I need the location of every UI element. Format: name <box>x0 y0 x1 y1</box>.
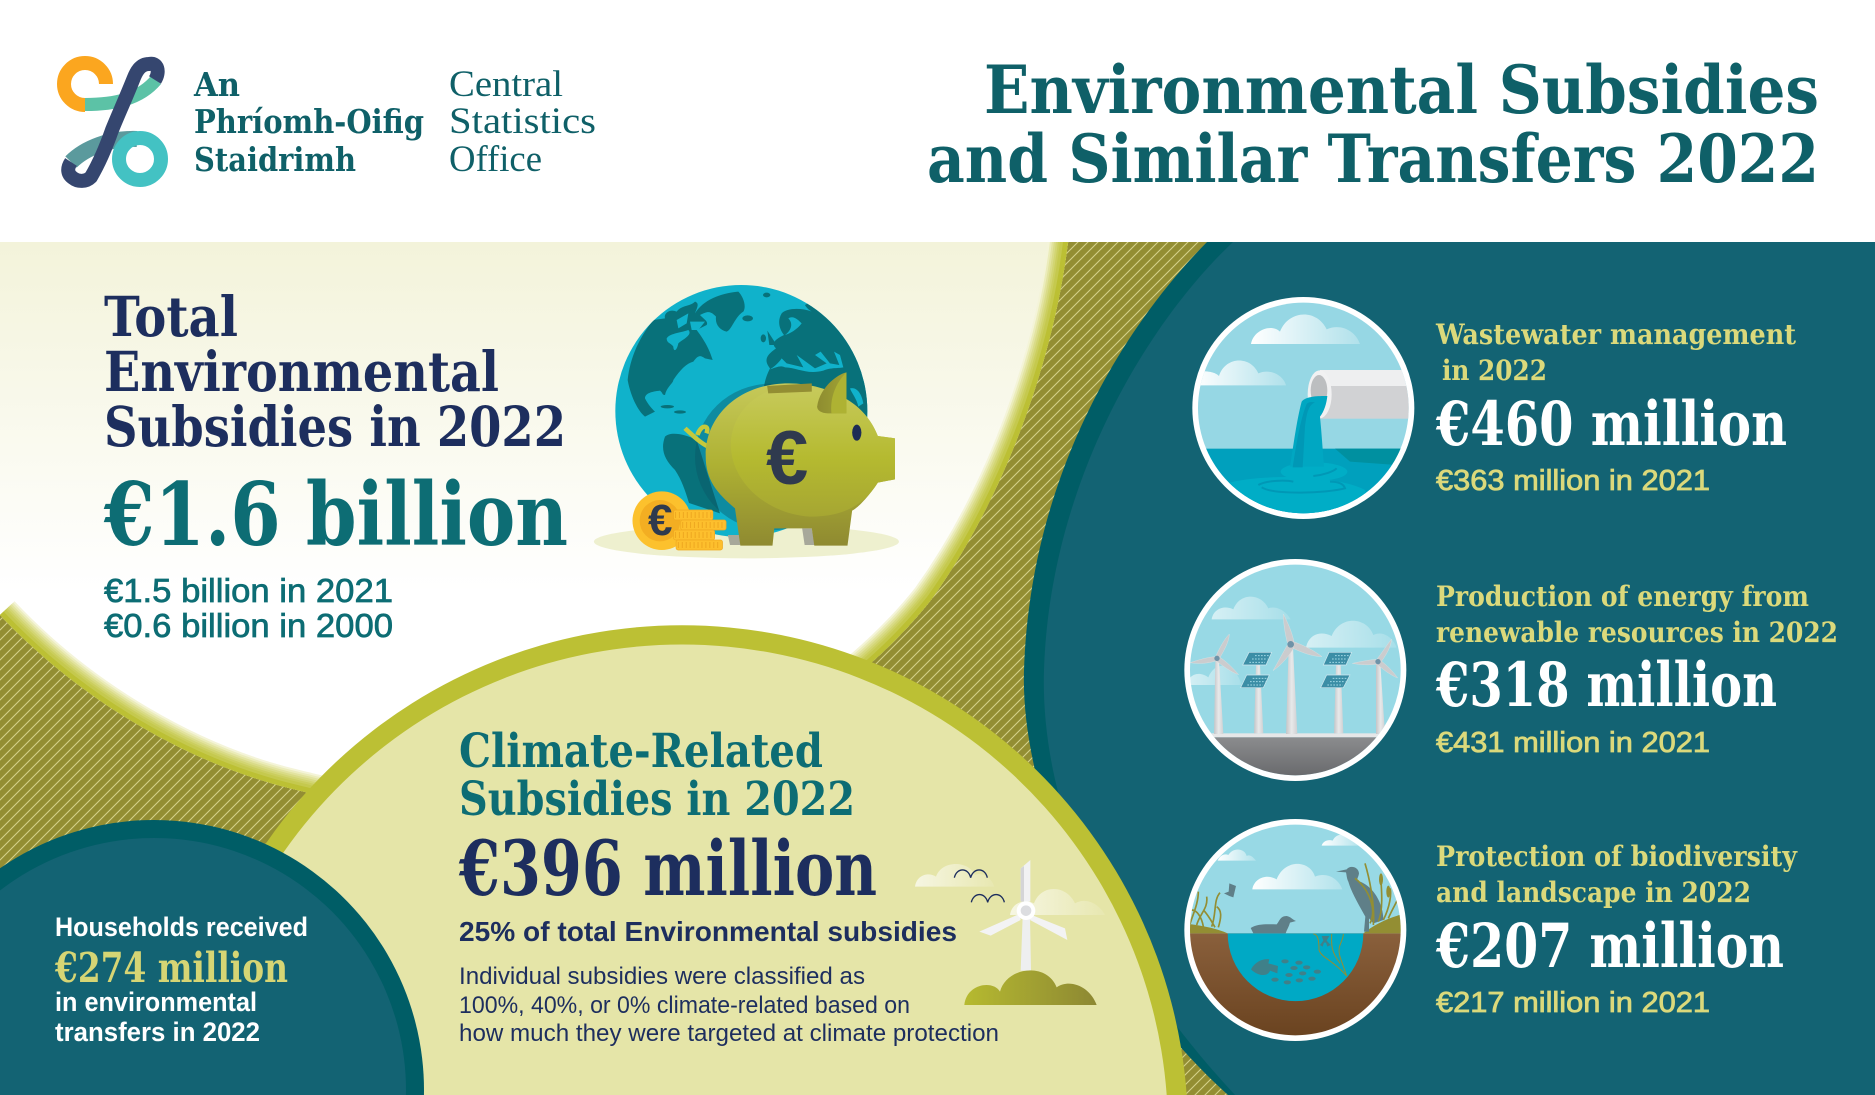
heading: climate-related subsidies: Subsidies in 2022 <box>459 772 855 827</box>
renewable energy text <box>1435 580 1838 759</box>
climate description: Individual subsidies were classified as <box>459 963 865 990</box>
logo symbol <box>64 63 161 181</box>
wastewater text: in 2022 <box>1442 354 1547 387</box>
heading: total environmental subsidies: Total <box>104 284 238 349</box>
households text: transfers in 2022 <box>55 1017 260 1047</box>
logo wordmark English: Central <box>449 64 563 105</box>
logo wordmark Irish: Staidrimh <box>194 140 356 179</box>
biodiversity text: €217 million in 2021 <box>1436 987 1710 1019</box>
logo wordmark Irish: An <box>193 65 240 104</box>
heading: total environmental subsidies: Environmental <box>104 339 499 404</box>
logo wordmark Irish <box>193 65 424 179</box>
biodiversity amount: €207 million <box>1435 911 1784 982</box>
icon: wind turbine on hill <box>915 860 1105 1005</box>
north america <box>628 292 745 417</box>
logo wordmark English: Office <box>449 139 542 180</box>
big number: 1.6 billion: €1.6 billion <box>103 463 568 566</box>
wastewater text <box>1435 318 1796 497</box>
water plants <box>1313 934 1347 976</box>
piggy bank and coins <box>632 372 895 550</box>
panel: right teal background <box>1024 242 1875 1095</box>
previous years comparison: €1.5 billion in 2021 <box>104 572 393 609</box>
icon: globe and piggy bank <box>594 285 910 558</box>
icon: wastewater pipe <box>1190 297 1417 525</box>
turbine and panel towers <box>1214 647 1385 734</box>
climate description <box>459 963 999 1047</box>
coin euro sign: € <box>648 496 672 545</box>
renewable energy text: renewable resources in 2022 <box>1436 616 1838 649</box>
panel: total subsidies background <box>0 242 1068 825</box>
heading: climate-related subsidies: Climate-Related <box>459 724 823 779</box>
big number: 396 million: €396 million <box>458 824 877 913</box>
icon: wind turbines and solar panels <box>1183 559 1410 787</box>
households text: in environmental <box>55 987 257 1017</box>
heading: climate-related subsidies <box>459 724 855 827</box>
wastewater text: €363 million in 2021 <box>1436 465 1710 497</box>
icon: wetland biodiversity <box>1183 819 1410 1047</box>
reeds <box>1190 863 1400 927</box>
wastewater text: Wastewater management <box>1435 318 1796 351</box>
share of total: 25% of total Environmental subsidies <box>459 916 957 947</box>
renewable energy text: €431 million in 2021 <box>1436 727 1710 759</box>
south america <box>663 434 720 513</box>
logo wordmark English: Statistics <box>449 101 596 142</box>
eurasia and africa <box>764 304 868 418</box>
biodiversity text <box>1435 840 1798 1019</box>
heading: total environmental subsidies <box>104 284 566 459</box>
logo wordmark English <box>449 64 596 180</box>
panel: households circle <box>0 820 424 1095</box>
households amount: €274 million <box>54 944 288 992</box>
panel: climate-related circle <box>177 625 1187 1095</box>
frog <box>1320 936 1331 947</box>
biodiversity text: Protection of biodiversity <box>1436 840 1798 873</box>
households text <box>54 912 308 1047</box>
climate description: how much they were targeted at climate protection <box>459 1020 999 1047</box>
households text: Households received <box>55 912 308 942</box>
fish <box>1251 959 1321 984</box>
previous years comparison: €0.6 billion in 2000 <box>104 607 393 644</box>
previous years comparison <box>104 572 393 644</box>
iceland and svalbard <box>742 315 753 321</box>
butterfly <box>1224 883 1236 897</box>
title <box>927 51 1819 198</box>
wastewater amount: €460 million <box>1435 389 1787 460</box>
logo <box>64 63 596 181</box>
hatched olive background <box>0 242 1875 1095</box>
logo wordmark Irish: Phríomh-Oifig <box>194 102 424 141</box>
piggy bank euro sign: € <box>766 416 808 501</box>
globe <box>615 285 868 536</box>
heading: total environmental subsidies: Subsidies in 2022 <box>104 394 566 459</box>
duck <box>1251 916 1296 933</box>
renewable energy amount: €318 million <box>1435 650 1777 721</box>
climate description: 100%, 40%, or 0% climate-related based on <box>459 992 910 1019</box>
biodiversity text: and landscape in 2022 <box>1436 876 1751 909</box>
renewable energy text: Production of energy from <box>1436 580 1809 613</box>
heron <box>1336 867 1383 932</box>
pig shadow <box>695 384 787 530</box>
